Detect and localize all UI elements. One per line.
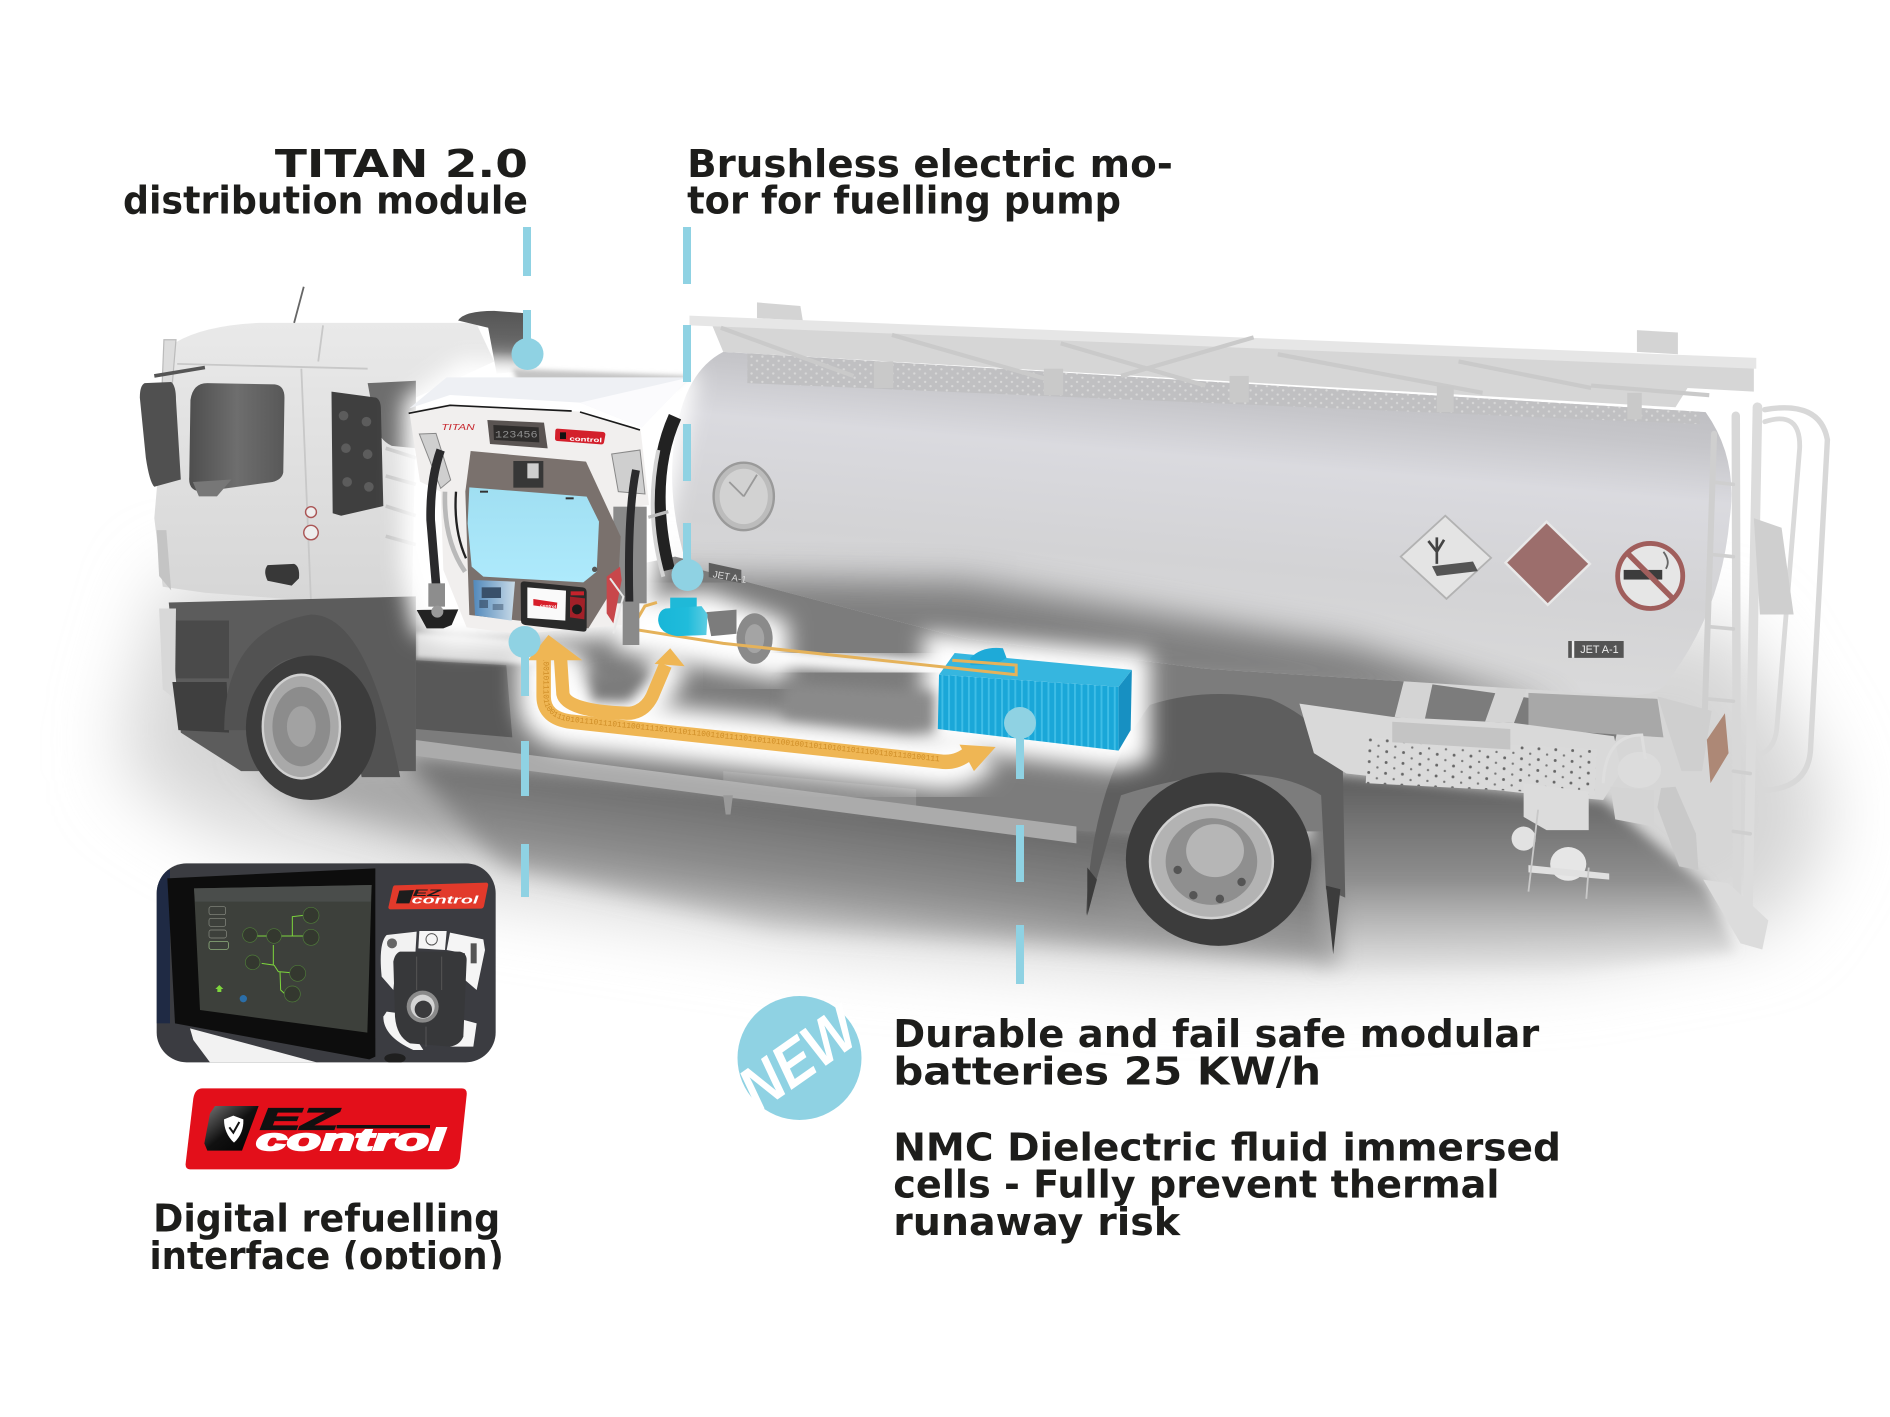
truck illustration [102, 286, 1850, 1004]
heading: brushless electric motor: Brushless electric mo- [687, 142, 1173, 187]
hose reel [445, 492, 465, 572]
infographic canvas [102, 148, 1850, 1270]
NEW badge: NEW [726, 992, 874, 1125]
rear chassis and hardware [1299, 670, 1712, 899]
fuel coupling [1512, 783, 1609, 899]
cab [140, 287, 526, 605]
hose connector [607, 567, 639, 645]
antenna [294, 287, 304, 323]
caption: digital refuelling interface: interface (option) [149, 1234, 504, 1279]
control unit [521, 581, 587, 632]
meter display: 123456 [495, 429, 538, 440]
arrow: battery data link [536, 660, 996, 771]
underbody and chassis [395, 557, 1663, 843]
EZ control badge [555, 429, 605, 444]
wing mirror [140, 367, 231, 496]
cab side window [189, 383, 284, 492]
leader line: digital interface [508, 626, 540, 897]
rear recess and storage panel [368, 381, 416, 448]
logo: EZ control [186, 1088, 467, 1169]
heading: batteries description [893, 1012, 1561, 1245]
panel: digital interface photo [157, 863, 496, 1063]
safety stickers [304, 507, 318, 540]
control unit: control [540, 603, 556, 609]
arrow: motor data link [561, 648, 685, 713]
air deflector [458, 311, 526, 374]
rear wheel group [1086, 694, 1345, 954]
heading: batteries description: NMC Dielectric fluid immersed [893, 1125, 1561, 1170]
small EZ badge: control [412, 894, 480, 906]
meter display [487, 420, 548, 448]
logo: EZ control: EZ [260, 1102, 341, 1136]
air reservoir [1603, 735, 1661, 827]
control buttons [381, 932, 417, 990]
label: JET A-1 rear [1568, 641, 1624, 658]
usb port [384, 1053, 406, 1063]
label: JET A-1 front: JET A-1 [712, 569, 747, 586]
label: JET A-1 rear: JET A-1 [1580, 644, 1619, 656]
ground shadow [127, 578, 1826, 976]
door handle [265, 564, 299, 586]
leader line: batteries [1004, 707, 1036, 984]
caption: digital refuelling interface: Digital refuelling [153, 1196, 500, 1241]
heading: TITAN 2.0 distribution module: distribution module [123, 178, 528, 223]
heading: brushless electric motor: tor for fuelling pump [687, 178, 1121, 223]
gauge hatch [714, 463, 774, 530]
rear ladder and handrail [1703, 407, 1827, 949]
process diagram [258, 915, 303, 994]
leader line: TITAN module [512, 227, 544, 370]
front wheel group [159, 596, 416, 800]
roof walkway platform [689, 302, 1756, 419]
heading: batteries description: runaway risk [893, 1200, 1181, 1245]
heading: batteries description: Durable and fail safe modular [893, 1012, 1539, 1057]
heading: TITAN 2.0 distribution module [123, 142, 528, 223]
sign: no smoking [1618, 543, 1683, 608]
heading: batteries description: cells - Fully prevent thermal [893, 1163, 1500, 1208]
white glow around highlighted components [410, 367, 1139, 763]
small EZ badge: EZ [413, 888, 442, 898]
nozzle [417, 583, 458, 628]
camera window [513, 461, 543, 488]
nozzle holders [419, 433, 645, 494]
module cover [409, 377, 690, 427]
inner housing [465, 451, 621, 628]
pump flange [706, 610, 736, 636]
heading: brushless electric motor [687, 142, 1173, 223]
arrow head shared [528, 635, 582, 660]
blue flow meter [473, 580, 515, 621]
heading: batteries description: batteries 25 KW/h [893, 1049, 1321, 1094]
touch screen [194, 885, 372, 1033]
tank [651, 352, 1731, 711]
fuel pump motor and pipework [632, 598, 1016, 675]
white body strip [190, 1028, 317, 1062]
data flow arrows [529, 635, 996, 771]
top of distribution housing behind cover [512, 369, 689, 388]
label: JET A-1 front [709, 563, 747, 586]
small EZ badge [388, 883, 488, 909]
arrow: battery data link: 1001011101100111010111011101110011110101101110011011110110110100100110110101101110011011101001110110101101100110111011010011011101100111010 [544, 660, 939, 762]
caption: digital refuelling interface [152, 1202, 501, 1270]
EZ control badge: control [569, 436, 603, 444]
screen bezel [167, 868, 375, 1059]
rotary controller [393, 952, 467, 1047]
logo: EZ control: control [256, 1123, 447, 1157]
distribution module [409, 377, 690, 645]
hazard sign: environment [1401, 516, 1491, 599]
TITAN brand: TITAN [441, 422, 476, 432]
delivery hoses [431, 450, 636, 602]
blue access panel [468, 487, 599, 582]
module face [409, 404, 649, 634]
battery pack [938, 648, 1132, 751]
tank saddles [1395, 670, 1532, 723]
leader line: electric motor [672, 227, 704, 591]
heading: TITAN 2.0 distribution module: TITAN 2.0 [275, 142, 528, 187]
hazard sign: flammable [1506, 522, 1590, 605]
